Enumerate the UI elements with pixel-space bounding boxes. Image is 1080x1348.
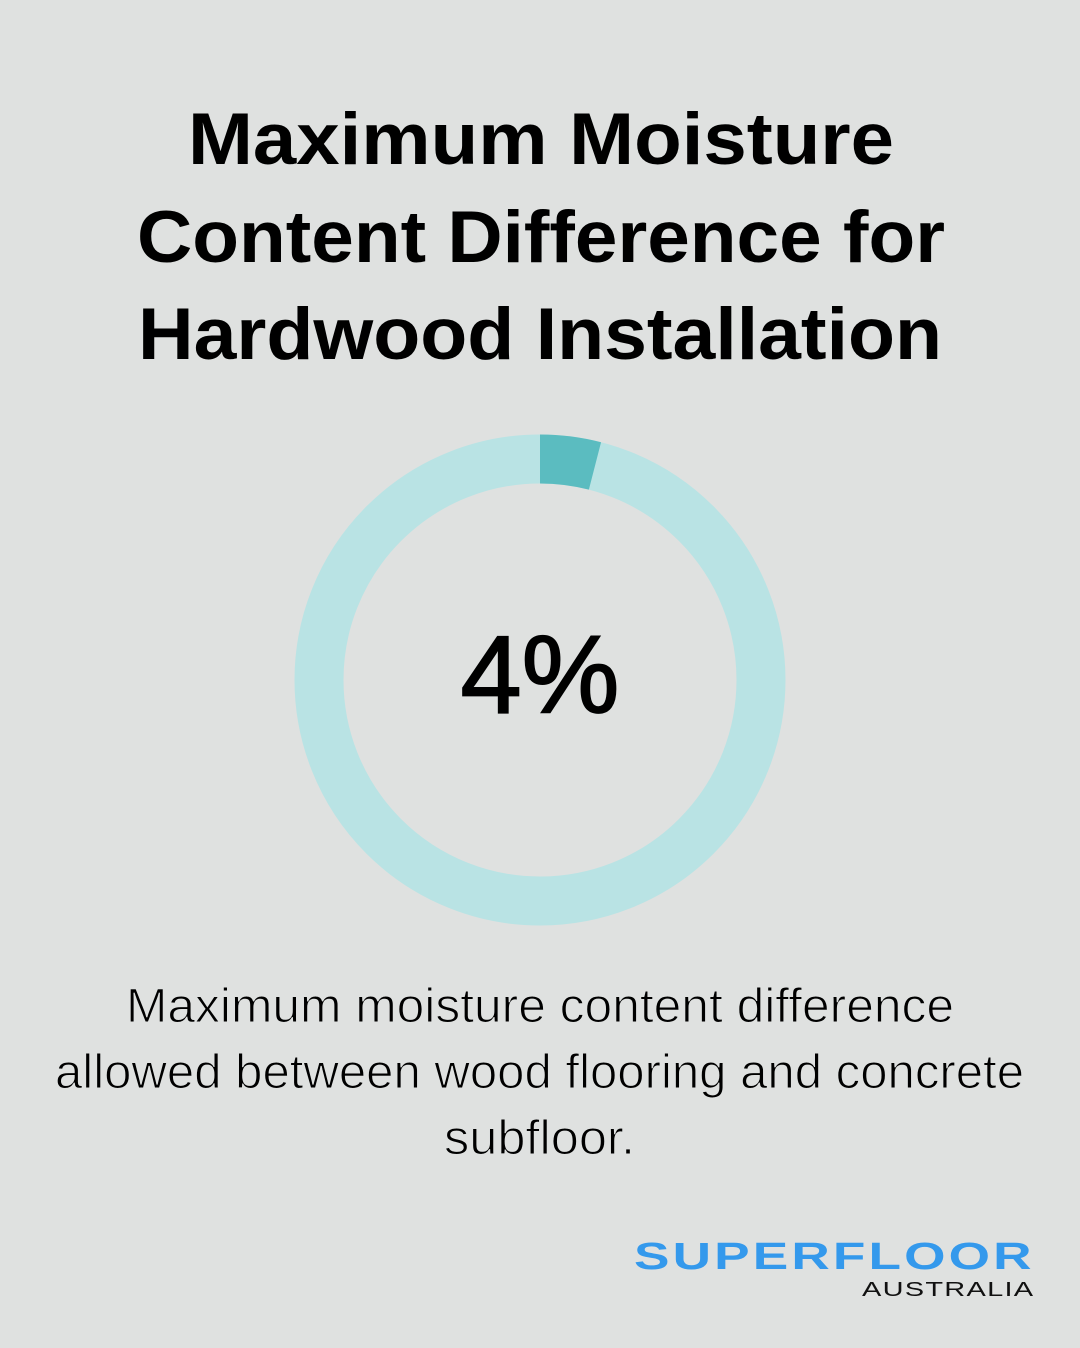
title: Maximum Moisture <box>188 99 894 180</box>
donut value segment: 4% <box>540 434 601 490</box>
description text: allowed between wood flooring and concrete <box>55 1046 1024 1099</box>
center value: 4% <box>461 614 619 736</box>
description text: subfloor. <box>444 1112 635 1165</box>
logo subtitle: AUSTRALIA <box>862 1278 1034 1301</box>
title <box>137 99 945 375</box>
donut chart <box>319 434 761 901</box>
logo wordmark: SUPERFLOOR <box>634 1234 1032 1277</box>
description text: Maximum moisture content difference <box>126 980 954 1033</box>
logo: Superfloor Australia <box>634 1234 1034 1301</box>
title: Content Difference for <box>137 197 945 278</box>
description text <box>55 980 1024 1165</box>
title: Hardwood Installation <box>138 294 942 375</box>
donut track <box>319 459 761 901</box>
